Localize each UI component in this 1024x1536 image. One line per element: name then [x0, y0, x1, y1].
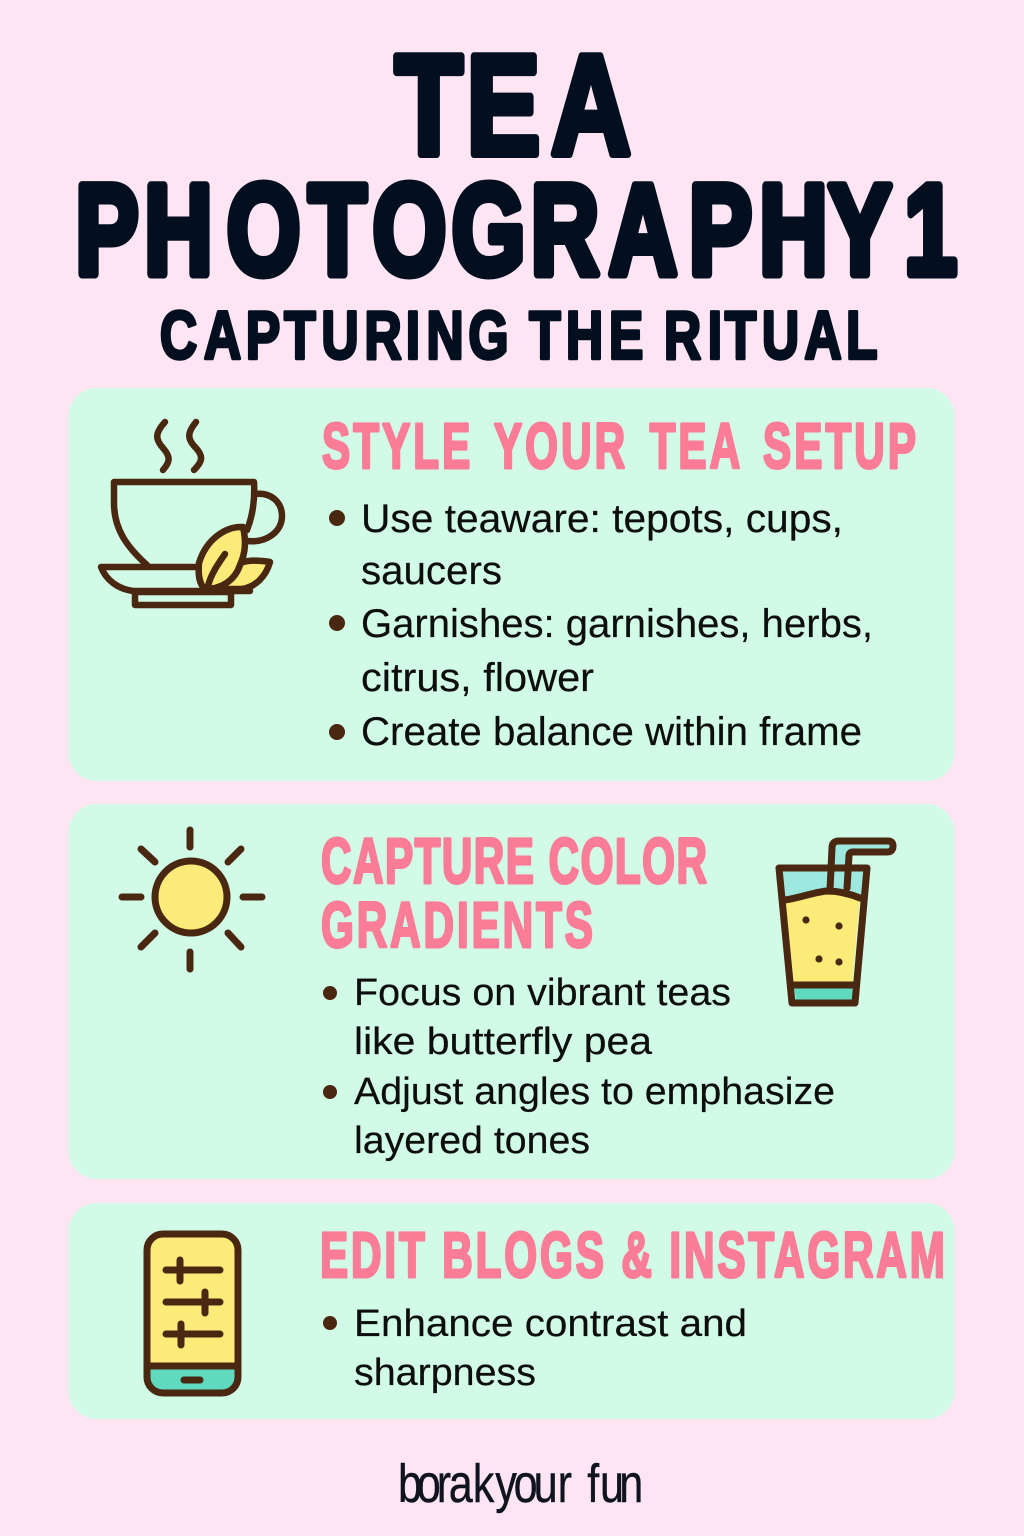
panel: style your tea setup — [68, 388, 954, 781]
heading: GRADIENTS — [321, 890, 593, 961]
bullet list: citrus, flower — [361, 656, 594, 700]
bullet list: Enhance contrast and — [354, 1303, 747, 1345]
icon: iced tea glass — [779, 841, 893, 1003]
bullet list: layered tones — [354, 1120, 590, 1162]
heading: STYLE YOUR TEA SETUP — [322, 411, 916, 482]
bullet list: saucers — [361, 549, 502, 593]
bullet list — [323, 972, 835, 1162]
icon: sun — [122, 830, 262, 969]
heading — [321, 826, 707, 961]
title: TEA — [395, 26, 631, 184]
bullet list: Adjust angles to emphasize — [354, 1071, 835, 1113]
bullet list — [329, 497, 873, 754]
panel: capture color gradients — [68, 804, 954, 1179]
icon: phone with sliders — [147, 1234, 238, 1393]
bullet list: Create balance within frame — [361, 710, 862, 754]
footer wordmark: borakyour fun — [398, 1455, 643, 1514]
bullet list: like butterfly pea — [354, 1021, 653, 1063]
subtitle: CAPTURING THE RITUAL — [160, 297, 878, 373]
heading: EDIT BLOGS & INSTAGRAM — [320, 1220, 945, 1291]
bullet list — [323, 1303, 747, 1394]
bullet list: Garnishes: garnishes, herbs, — [361, 602, 873, 646]
bullet list: Use teaware: tepots, cups, — [361, 497, 843, 541]
bullet list: Focus on vibrant teas — [354, 972, 731, 1014]
panel: edit blogs and instagram — [68, 1203, 954, 1419]
bullet list: sharpness — [354, 1352, 536, 1394]
heading: CAPTURE COLOR — [321, 826, 707, 897]
title: PHOTOGRAPHY 1 — [75, 158, 957, 301]
title — [75, 26, 957, 301]
icon: tea cup — [101, 422, 282, 605]
